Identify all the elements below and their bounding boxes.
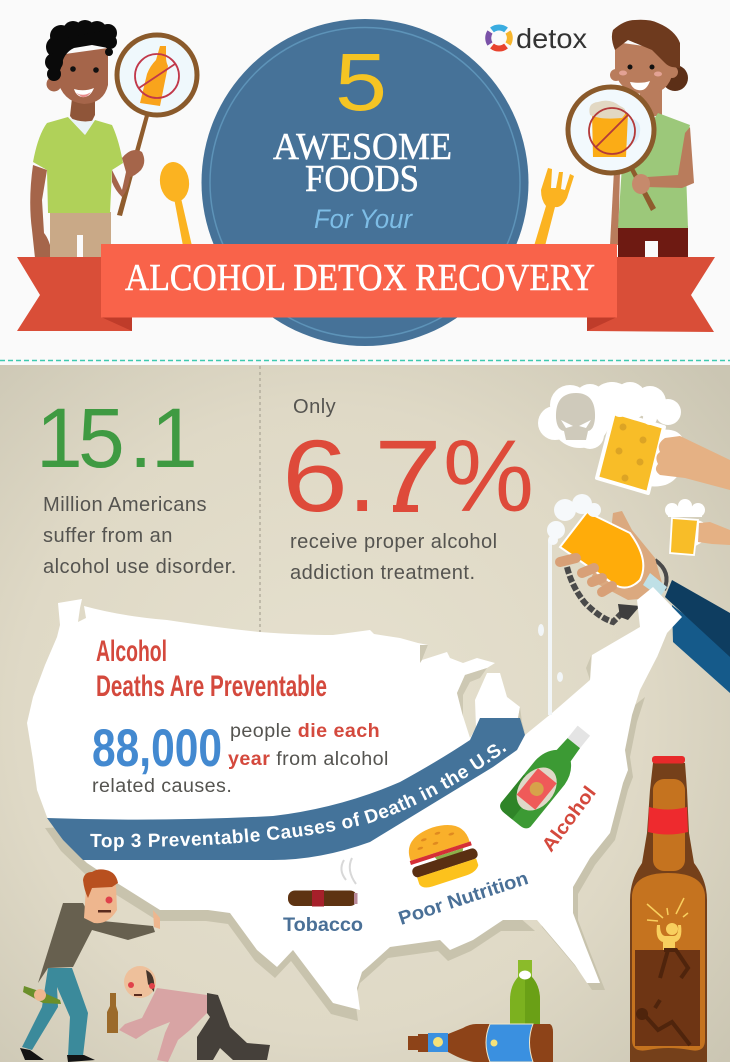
illustration: large brown bottle with trapped figures bbox=[630, 756, 707, 1062]
title: For Your: For Your bbox=[314, 204, 413, 234]
woman shirt bbox=[618, 113, 690, 228]
illustration: woman holding no-beer sign bbox=[568, 20, 694, 257]
stat: 6.7%: receive proper alcohol bbox=[290, 531, 498, 553]
trousers bbox=[197, 993, 270, 1060]
stat: 88,000 deaths bbox=[92, 719, 389, 797]
head bbox=[124, 966, 156, 998]
lower section background bbox=[0, 365, 730, 1062]
shirt bbox=[119, 988, 207, 1062]
heading: alcohol deaths are preventable: Alcohol bbox=[96, 635, 167, 668]
head bbox=[84, 885, 117, 923]
stat: 88,000 deaths: related causes. bbox=[92, 775, 232, 797]
hand bbox=[153, 910, 160, 929]
stat: 15.1 million: 15.1 bbox=[36, 391, 198, 485]
heading: alcohol deaths are preventable bbox=[96, 635, 327, 703]
man right hand bbox=[112, 150, 144, 197]
illustration: spilled foam stream bbox=[538, 540, 563, 715]
illustration: drunk man crawling bbox=[107, 966, 270, 1062]
ribbon text bbox=[90, 742, 518, 847]
jeans bbox=[22, 968, 88, 1056]
submerged figure bbox=[640, 950, 690, 1045]
stat: 6.7%: % bbox=[443, 419, 534, 533]
man trousers bbox=[50, 212, 111, 257]
stat: 15.1 million bbox=[36, 391, 237, 578]
woman neck bbox=[640, 88, 662, 116]
bottle bbox=[23, 986, 61, 1004]
stat: 88,000 deaths: people die each bbox=[230, 720, 380, 742]
man left arm bbox=[30, 165, 53, 258]
hand bbox=[656, 436, 730, 490]
stat: 15.1 million: Million Americans bbox=[43, 494, 207, 516]
map lakes shading bbox=[420, 645, 591, 733]
map shadow: west and south coast bbox=[45, 811, 535, 1021]
illustration: small beer mug and hand bbox=[665, 499, 730, 555]
sign handle bbox=[117, 115, 149, 216]
illustration: drunk man leaning on map bbox=[20, 869, 160, 1062]
stat: 6.7%: 6 bbox=[282, 419, 348, 533]
sweater bbox=[38, 903, 155, 983]
man hair bbox=[45, 20, 117, 81]
stat: 15.1 million: alcohol use disorder. bbox=[43, 556, 237, 578]
woman right arm bbox=[646, 127, 694, 188]
woman left arm bbox=[610, 170, 620, 245]
bottle bbox=[107, 993, 118, 1033]
woman bun bbox=[662, 65, 688, 91]
trapped figure above liquid bbox=[657, 925, 681, 950]
hand bbox=[590, 511, 662, 600]
woman trousers bbox=[618, 226, 688, 257]
stat: 6.7% bbox=[282, 396, 534, 584]
man neck bbox=[70, 98, 95, 135]
header background bbox=[0, 0, 730, 361]
icon: spoon bbox=[157, 160, 192, 246]
icon: green beer bottle bbox=[497, 719, 599, 831]
logo: detox: detox bbox=[516, 23, 587, 54]
woman head bbox=[615, 42, 673, 94]
illustration: green bottle on floor bbox=[510, 960, 540, 1030]
illustration: brown bottle on floor bbox=[408, 1024, 553, 1062]
map shadow: east coast bbox=[505, 697, 645, 990]
foam bbox=[547, 494, 601, 545]
illustration: thought bubble with skull bbox=[538, 382, 681, 449]
label: alcohol: Alcohol bbox=[538, 783, 601, 856]
title: Awesome: AWESOME bbox=[273, 126, 452, 168]
icon: cigar bbox=[288, 858, 358, 906]
tilted mug bbox=[560, 512, 643, 588]
man head bbox=[57, 48, 108, 104]
ribbon: top causes of death: Top 3 Preventable Causes of Death in the U.S. bbox=[90, 744, 506, 852]
stat: 6.7%: 7 bbox=[374, 419, 442, 533]
stat: 6.7%: addiction treatment. bbox=[290, 562, 475, 584]
sign: no beer bbox=[568, 87, 654, 173]
label: tobacco: Tobacco bbox=[283, 915, 363, 936]
heading: alcohol deaths are preventable: Deaths Are Preventable bbox=[96, 670, 327, 703]
man shirt bbox=[33, 117, 123, 213]
illustration: chained hand with tilted mug bbox=[547, 494, 667, 622]
icon: fork bbox=[534, 168, 574, 246]
handcuff chain bbox=[567, 567, 627, 622]
stat: 88,000 deaths: 88,000 bbox=[92, 719, 222, 778]
illustration: man holding no-bottle sign bbox=[30, 20, 197, 258]
banner text: ALCOHOL DETOX RECOVERY bbox=[125, 257, 595, 299]
woman hair top bbox=[612, 20, 680, 68]
title circle bbox=[202, 19, 528, 346]
label: poor nutrition: Poor Nutrition bbox=[396, 868, 531, 930]
hair bbox=[83, 869, 118, 898]
skull bbox=[556, 393, 595, 440]
stat: 6.7%: . bbox=[348, 419, 376, 533]
sign handle bbox=[630, 168, 656, 211]
woman hand bbox=[632, 174, 650, 194]
banner ribbon bbox=[17, 244, 715, 332]
illustration: shirt cuff bbox=[630, 573, 682, 657]
title number 5: 5 bbox=[335, 37, 387, 128]
stat: 88,000 deaths: year from alcohol bbox=[228, 748, 389, 770]
stat: 15.1 million: suffer from an bbox=[43, 525, 173, 547]
map of the United States bbox=[27, 599, 668, 1010]
stat: 6.7%: Only bbox=[293, 396, 336, 418]
title: Foods: FOODS bbox=[305, 158, 419, 200]
illustration: big beer mug and hand bbox=[597, 399, 730, 493]
logo: detox bbox=[488, 23, 587, 54]
sign: no bottle bbox=[117, 35, 197, 115]
shoes bbox=[20, 1048, 95, 1062]
fingers bbox=[560, 558, 612, 592]
icon: burger bbox=[401, 817, 483, 891]
illustration: sleeve bbox=[665, 580, 730, 693]
